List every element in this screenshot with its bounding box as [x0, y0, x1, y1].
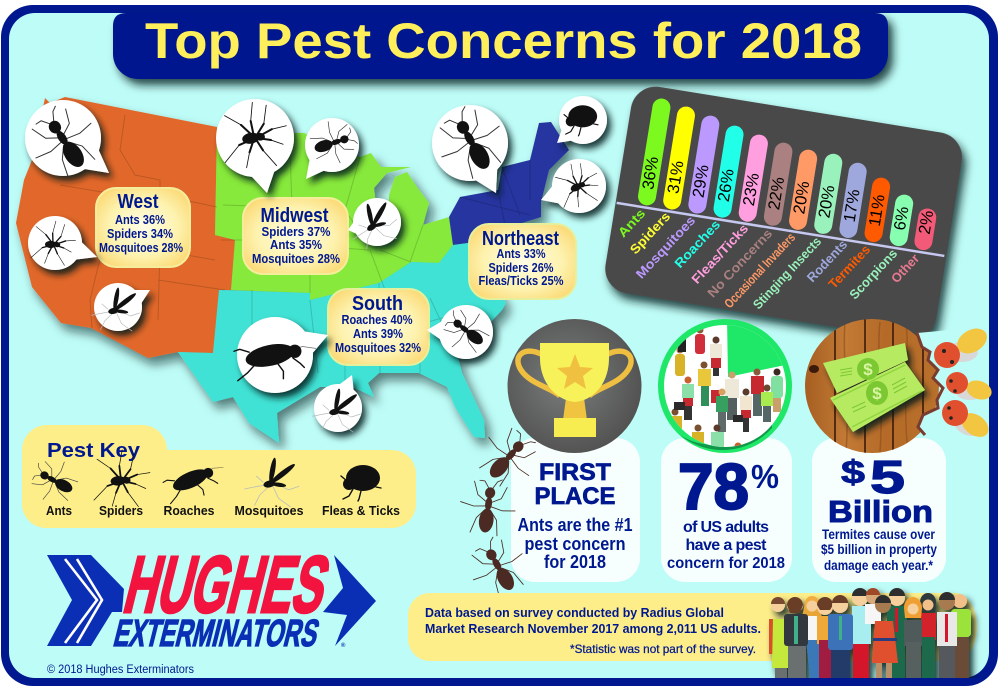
bar chart panel — [602, 83, 966, 343]
bar: Other 2% — [913, 207, 938, 251]
icon: termite middle — [946, 372, 994, 403]
wood circle with money: $ — [863, 360, 873, 379]
label: Northeast — [469, 224, 576, 299]
bar: Spiders 31%: 31% — [664, 159, 688, 195]
map region: West — [16, 97, 235, 358]
panel: 78 percent: 78 — [678, 450, 749, 523]
panel: first place: PLACE — [534, 483, 616, 510]
map of United States — [16, 97, 569, 443]
people group — [769, 588, 971, 682]
survey note: *Statistic was not part of the survey. — [570, 642, 756, 656]
bubble: Northeast spider — [541, 159, 606, 213]
icon: brown ants — [457, 417, 548, 605]
chart category labels: Ants — [615, 206, 648, 240]
bar: No Concerns 22% — [763, 141, 794, 227]
bubble: Northeast ant — [426, 97, 515, 193]
panel: 5 billion: 5 — [870, 451, 905, 503]
panel: 5 billion: damage each year.* — [824, 557, 933, 573]
chart category labels: Roaches — [671, 217, 723, 271]
map region: Northeast — [449, 122, 569, 245]
icon: trophy — [508, 319, 642, 453]
bar: No Concerns 22%: 22% — [765, 175, 788, 211]
label: West: West — [118, 191, 159, 213]
bar: Roaches 26%: 26% — [715, 167, 738, 203]
chart category labels: Stinging Insects — [750, 234, 824, 312]
bar: Stinging Insects 20% — [813, 152, 844, 235]
bubble: South ant — [427, 300, 496, 361]
icon: money — [823, 343, 925, 432]
wood circle with money: $ — [872, 384, 882, 403]
bubble: Midwest ant — [305, 115, 361, 179]
logo: Hughes Exterminators: ® — [341, 642, 346, 649]
bar: Roaches 26% — [712, 124, 745, 219]
bar: Rodents 17% — [838, 161, 868, 239]
bar: Termites 11%: 11% — [866, 193, 889, 228]
pest key: Pest Key — [47, 440, 141, 462]
label: West: Mosquitoes 28% — [99, 240, 183, 255]
bar: Occasional Invaders 20%: 20% — [790, 180, 813, 215]
bar: Rodents 17%: 17% — [841, 188, 864, 224]
label: West — [96, 188, 190, 267]
bar: Occasional Invaders 20% — [788, 148, 818, 231]
bubble: Midwest spider — [216, 99, 294, 193]
label: West: Ants 36% — [115, 212, 165, 227]
bar: Fleas/Ticks 23%: 23% — [740, 171, 763, 207]
label: Midwest: Midwest — [260, 205, 329, 227]
label: Northeast: Fleas/Ticks 25% — [478, 273, 564, 288]
panel: first place — [511, 438, 640, 582]
panel: 78 percent: have a pest — [686, 537, 767, 554]
bubble: West ant — [18, 95, 109, 186]
chart category labels — [615, 206, 922, 312]
map region: Midwest — [215, 127, 453, 300]
pest key — [22, 425, 416, 528]
bar: Other 2%: 2% — [916, 209, 937, 236]
pest key: Mosquitoes — [234, 503, 304, 518]
chart category labels: Termites — [825, 242, 873, 292]
bar: Stinging Insects 20%: 20% — [815, 184, 839, 219]
bubble: Northeast flea — [557, 96, 607, 144]
label: South — [328, 289, 429, 365]
label: Midwest: Spiders 37% — [262, 224, 331, 239]
logo: Hughes Exterminators — [47, 540, 376, 655]
label: Northeast: Ants 33% — [496, 246, 546, 261]
survey note: Market Research November 2017 among 2,011 US adults. — [425, 622, 761, 636]
panel: 78 percent: % — [751, 458, 779, 495]
panel: 5 billion: Termites cause over — [822, 526, 935, 542]
map state lines — [60, 115, 530, 385]
label: South: Ants 39% — [353, 326, 403, 341]
pest key: Spiders — [99, 503, 143, 518]
bubble: South mosquito — [312, 375, 362, 432]
bar: Scorpions 6%: 6% — [891, 205, 913, 232]
panel: 5 billion — [812, 438, 946, 582]
pest key: Fleas & Ticks — [322, 503, 400, 518]
bubble: West mosquito — [92, 283, 150, 331]
copyright: © 2018 Hughes Exterminators — [47, 664, 194, 676]
survey note — [408, 593, 977, 661]
chart category labels: Spiders — [627, 209, 673, 257]
bar: Mosquitoes 29%: 29% — [690, 163, 713, 199]
pest key: Roaches — [164, 503, 214, 518]
panel: 5 billion: $ — [841, 454, 865, 490]
chart category labels: No Concerns — [704, 226, 775, 300]
pie photo: crowd of adults — [658, 318, 795, 457]
bar: Spiders 31% — [662, 105, 696, 211]
panel: 78 percent: concern for 2018 — [667, 555, 785, 572]
chart category labels: Other — [888, 251, 922, 286]
label: South: South — [352, 293, 403, 315]
chart category labels: Scorpions — [846, 246, 900, 302]
label: Midwest — [243, 198, 348, 274]
chart category labels: Fleas/Ticks — [688, 221, 751, 287]
label: West: Spiders 34% — [107, 226, 173, 241]
label: Northeast: Northeast — [482, 228, 559, 250]
wood circle with money — [805, 319, 950, 454]
panel: first place: Ants are the #1 — [518, 514, 632, 535]
icon: termite bottom — [942, 400, 993, 442]
label: South: Mosquitoes 32% — [335, 340, 421, 355]
title banner: Top Pest Concerns for 2018 — [145, 13, 862, 69]
bar: Ants 36% — [637, 97, 672, 207]
bar: Fleas/Ticks 23% — [737, 133, 769, 223]
chart category labels: Occasional Invaders — [721, 230, 798, 311]
panel: first place: for 2018 — [544, 551, 606, 572]
bar: Mosquitoes 29% — [687, 114, 721, 215]
panel: 78 percent — [661, 438, 792, 582]
bite mark edge — [917, 330, 950, 440]
survey note: Data based on survey conducted by Radius Global — [425, 606, 724, 620]
panel: 5 billion: Billion — [828, 494, 933, 529]
pest key: Ants — [46, 503, 72, 518]
label: South: Roaches 40% — [342, 312, 413, 327]
panel: 78 percent: of US adults — [683, 519, 769, 536]
bubble: Midwest mosquito — [343, 195, 404, 254]
bar: Ants 36%: 36% — [639, 155, 662, 191]
panel: first place: pest concern — [524, 533, 626, 554]
label: Midwest: Mosquitoes 28% — [252, 251, 340, 266]
chart category labels: Mosquitoes — [633, 213, 698, 282]
label: Midwest: Ants 35% — [270, 237, 322, 252]
panel: 5 billion: $5 billion in property — [821, 541, 937, 557]
panel: first place: FIRST — [539, 459, 611, 486]
bubble: South roach — [234, 317, 328, 393]
icon: termite top — [934, 323, 991, 368]
chart category labels: Rodents — [804, 237, 850, 285]
label: Northeast: Spiders 26% — [488, 260, 554, 275]
logo: Hughes Exterminators: HUGHES — [117, 540, 338, 630]
bar: Termites 11% — [863, 176, 891, 243]
logo: Hughes Exterminators: EXTERMINATORS — [110, 613, 323, 655]
bubble: West spider — [28, 216, 97, 270]
map region: South — [178, 243, 506, 443]
bar: Scorpions 6% — [888, 193, 915, 247]
